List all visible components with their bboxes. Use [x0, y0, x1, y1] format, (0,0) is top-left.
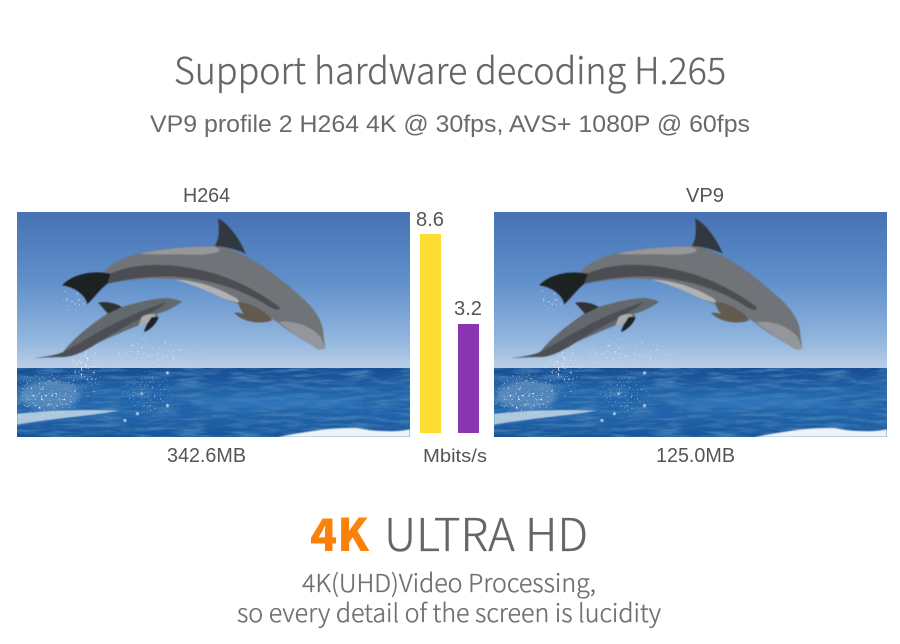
heading: H264: H264 [183, 185, 230, 207]
panel: VP9 comparison [493, 185, 887, 467]
file size: H264: 342.6MB [167, 445, 246, 467]
bar value: VP9: 3.2 [454, 297, 482, 320]
description text: 4K(UHD)Video Processing, [302, 564, 596, 600]
description text: so every detail of the screen is lucidity [237, 594, 661, 630]
bar: H264 yellow [420, 234, 441, 433]
bar chart: bitrate [416, 208, 487, 466]
heading: 4K ULTRA HD [310, 499, 588, 564]
description text [237, 564, 661, 630]
bar: VP9 purple [458, 324, 479, 433]
heading: VP9: VP9 [686, 185, 724, 207]
file size: VP9: 125.0MB [656, 445, 735, 467]
photo: dolphins VP9 [493, 212, 887, 437]
panel: H264 comparison [16, 185, 410, 467]
photo: dolphins H264 [16, 212, 410, 437]
axis unit: Mbits/s [423, 445, 487, 466]
4K emphasis: 4K [310, 499, 370, 564]
subtitle: VP9 profile 2 H264 4K @ 30fps, AVS+ 1080P @ 60fps [150, 111, 750, 138]
bar value: H264: 8.6 [416, 208, 444, 231]
ULTRA HD: ULTRA HD [384, 499, 588, 564]
title: Support hardware decoding H.265 [174, 41, 726, 95]
